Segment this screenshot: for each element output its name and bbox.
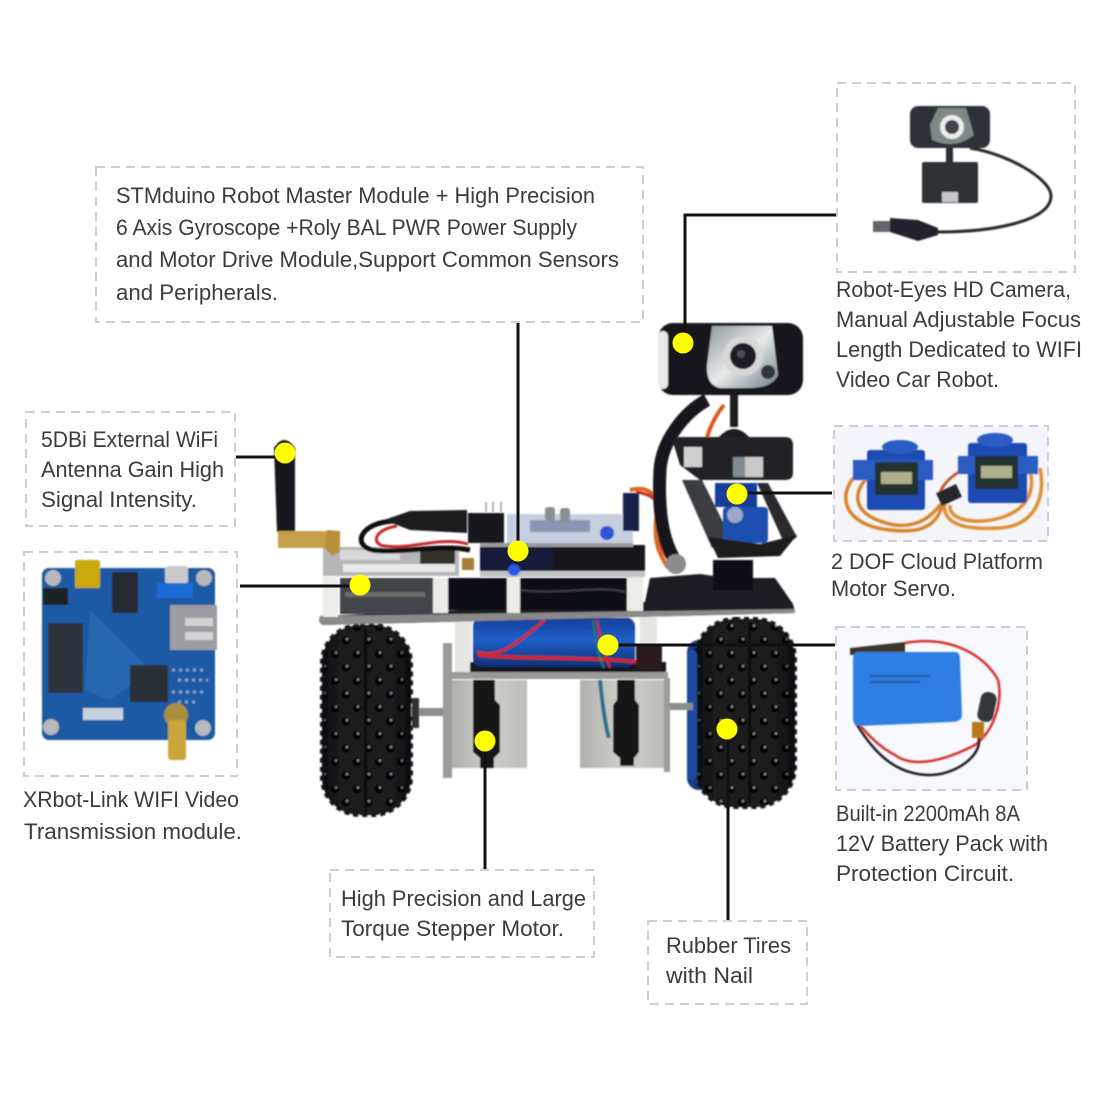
panel: camera: Video Car Robot. [836, 367, 999, 392]
panel: servos [831, 426, 1048, 601]
stepper motor right [580, 678, 670, 772]
lower module [340, 578, 633, 614]
panel: master module callout: and Peripherals. [116, 280, 278, 305]
main chassis plate [319, 574, 795, 625]
panel: camera: Robot-Eyes HD Camera, [836, 277, 1071, 302]
battery pack on robot [470, 618, 666, 676]
memory card reader [673, 437, 793, 480]
master module [468, 502, 645, 577]
robot photo [274, 323, 803, 815]
right wheel [687, 619, 795, 807]
panel: antenna callout: 5DBi External WiFi [41, 427, 218, 452]
panel: battery: Protection Circuit. [836, 861, 1014, 886]
leader lines [236, 215, 836, 920]
axles [411, 698, 693, 728]
camera mount cables [660, 395, 750, 574]
panel: WiFi video module [23, 552, 242, 844]
panel: camera: Length Dedicated to WIFI [836, 337, 1082, 362]
panel: stepper motor callout [330, 870, 594, 957]
panel: rubber tires callout: with Nail [665, 963, 753, 988]
webcam illustration [873, 106, 1051, 241]
panel: battery [836, 627, 1048, 886]
lower spacers [455, 617, 657, 675]
antenna [274, 440, 340, 556]
panel: master module callout: 6 Axis Gyroscope +Roly BAL PWR Power Supply [116, 215, 577, 240]
panel: stepper motor callout: High Precision and Large [341, 886, 586, 911]
panel: master module callout: STMduino Robot Master Module + High Precision [116, 183, 595, 208]
left wheel [322, 625, 411, 815]
servo lead [623, 489, 672, 568]
panel: rubber tires callout: Rubber Tires [666, 933, 791, 958]
battery pack illustration [850, 641, 999, 775]
stepper motor left [443, 643, 668, 778]
panel: antenna callout: Signal Intensity. [41, 487, 197, 512]
camera on robot [658, 323, 803, 395]
panel: WiFi video module: XRbot-Link WIFI Video [23, 787, 239, 812]
pan tilt platform [680, 480, 797, 604]
panel: master module callout: and Motor Drive Module,Support Common Sensors [116, 247, 619, 272]
panel: antenna callout: Antenna Gain High [41, 457, 224, 482]
panel: master module callout [96, 167, 643, 322]
upper spacers [323, 575, 643, 617]
panel: battery: 12V Battery Pack with [836, 831, 1048, 856]
marker dots [274, 332, 748, 752]
panel: rubber tires callout [648, 921, 807, 1004]
panel: camera [836, 83, 1082, 392]
panel: battery: Built-in 2200mAh 8A [836, 801, 1020, 826]
panel: WiFi video module: Transmission module. [24, 819, 242, 844]
panel: servos: Motor Servo. [831, 576, 956, 601]
panel: servos: 2 DOF Cloud Platform [831, 549, 1043, 574]
panel: stepper motor callout: Torque Stepper Motor. [341, 916, 564, 941]
panel: camera: Manual Adjustable Focus [836, 307, 1081, 332]
module board illustration [42, 560, 217, 760]
panel: antenna callout [26, 412, 235, 526]
WiFi module board [323, 547, 474, 576]
power jack and cable [361, 510, 470, 551]
servo illustration [846, 433, 1042, 531]
